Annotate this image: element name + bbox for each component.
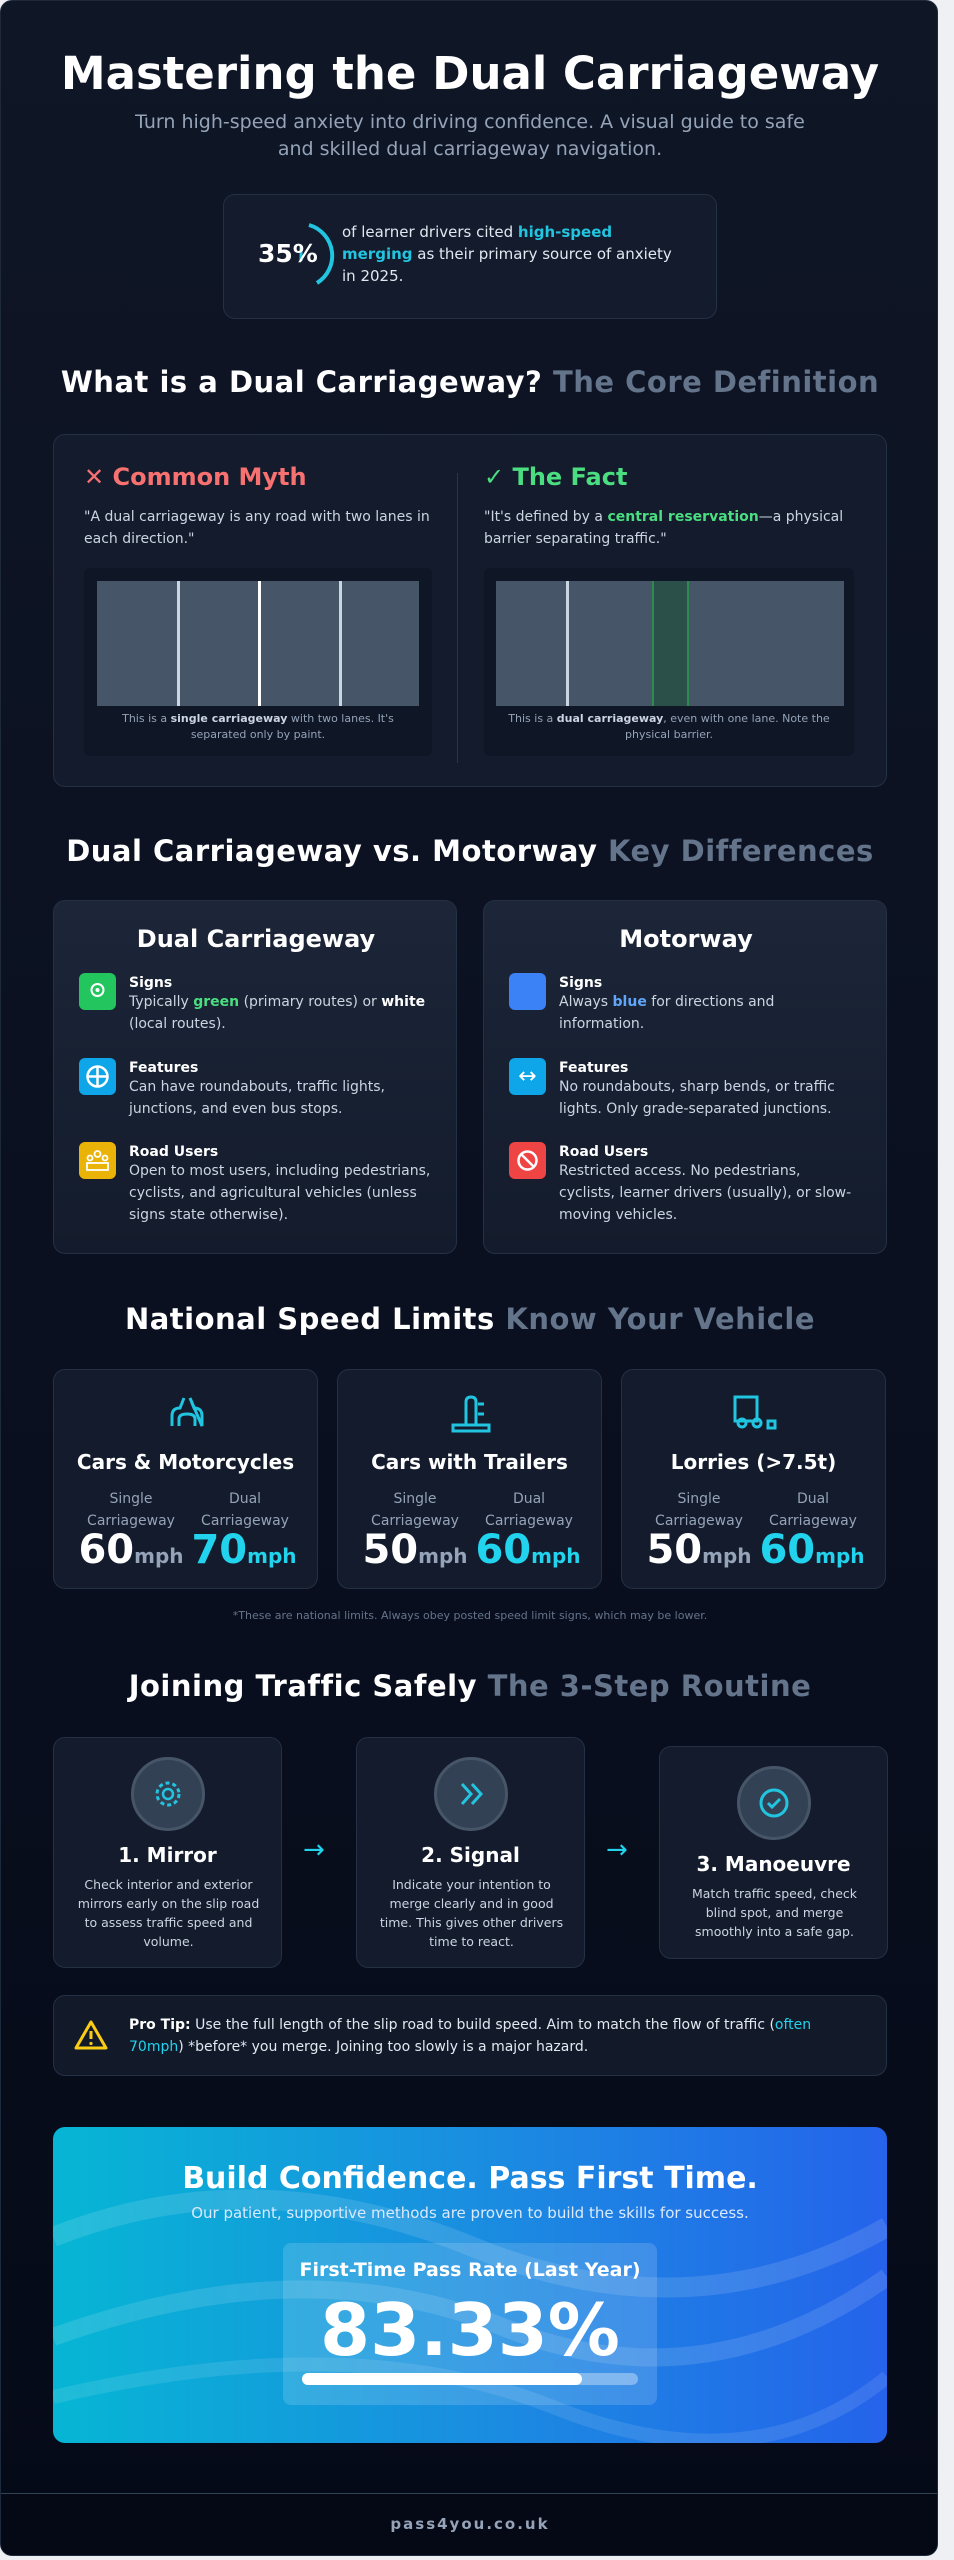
footnote: *These are national limits. Always obey posted speed limit signs, which may be lower. xyxy=(233,1609,707,1622)
item: road users: Road Users xyxy=(129,1144,218,1160)
item: features: Features xyxy=(129,1060,198,1076)
panel: dual carriageway: Dual Carriageway xyxy=(137,925,375,953)
item: signs xyxy=(559,975,774,1032)
item: features: No roundabouts, sharp bends, or traffic lights. Only grade-separated junctions. xyxy=(559,1079,835,1117)
item: signs: Signs xyxy=(559,975,602,991)
speed card: cars xyxy=(53,1369,318,1589)
fact column xyxy=(484,463,844,741)
icon: gauge arc xyxy=(300,223,334,285)
step 1: 1. Mirror xyxy=(118,1843,217,1867)
speed card: lorries: 60mph xyxy=(759,1527,865,1573)
myth heading: ✕ Common Myth xyxy=(84,463,307,491)
speed card: cars: Cars & Motorcycles xyxy=(77,1450,294,1474)
speed card: trailers xyxy=(337,1369,602,1589)
step 2: Indicate your intention to merge clearly and in good time. This gives other drivers time to react. xyxy=(380,1877,563,1949)
item: signs: Signs xyxy=(129,975,172,991)
fact road diagram xyxy=(484,568,854,756)
item: road users: Road Users xyxy=(559,1144,648,1160)
speed card: cars: 60mph xyxy=(78,1527,184,1573)
pro tip xyxy=(53,1995,887,2076)
item: signs: Always blue for directions and information. xyxy=(559,994,774,1032)
icon: features xyxy=(79,1058,116,1095)
heading: key differences: Dual Carriageway vs. Motorway Key Differences xyxy=(66,834,874,868)
icon: gear xyxy=(131,1757,205,1831)
myth quote: "A dual carriageway is any road with two lanes in each direction." xyxy=(84,509,430,547)
step 2: 2. Signal xyxy=(421,1843,520,1867)
CTA banner xyxy=(53,2127,887,2443)
icon: warning xyxy=(74,2020,108,2050)
speed card: lorries: Single Carriageway xyxy=(655,1491,743,1529)
title: Mastering the Dual Carriageway xyxy=(61,47,879,100)
panel: motorway xyxy=(483,900,887,1254)
icon: lorry xyxy=(734,1396,776,1430)
item: signs: Typically green (primary routes) or white (local routes). xyxy=(129,994,425,1032)
icon: arrows: ↔ xyxy=(518,1064,537,1089)
speed card: trailers: 50mph xyxy=(362,1527,468,1573)
panel: myth vs fact xyxy=(53,434,887,787)
icon: check circle xyxy=(737,1766,811,1840)
fact road diagram: This is a dual carriageway, even with one lane. Note the physical barrier. xyxy=(508,712,830,741)
panel: dual carriageway xyxy=(53,900,457,1254)
pass rate box: 83.33% xyxy=(320,2288,620,2372)
CTA heading: Build Confidence. Pass First Time. xyxy=(182,2161,758,2196)
speed card: lorries: 50mph xyxy=(646,1527,752,1573)
subtitle: Turn high-speed anxiety into driving confidence. A visual guide to safe and skilled dual carriageway navigation. xyxy=(135,111,805,160)
speed card: trailers: Dual Carriageway xyxy=(485,1491,573,1529)
heading: core definition: What is a Dual Carriageway? The Core Definition xyxy=(61,365,879,399)
speed card: trailers: 60mph xyxy=(475,1527,581,1573)
item: road users: Open to most users, including pedestrians, cyclists, and agricultural vehicles (unless signs state otherwise). xyxy=(129,1163,430,1223)
arrow: → xyxy=(303,1835,325,1865)
item: features: Features xyxy=(559,1060,628,1076)
step 1 xyxy=(53,1737,282,1968)
panel: motorway: Motorway xyxy=(619,925,753,953)
speed card: cars: Dual Carriageway xyxy=(201,1491,289,1529)
footer: pass4you.co.uk xyxy=(390,2515,550,2533)
heading: speed limits: National Speed Limits Know Your Vehicle xyxy=(125,1302,815,1336)
CTA subtext: Our patient, supportive methods are proven to build the skills for success. xyxy=(191,2204,749,2222)
stat number: 35% xyxy=(258,239,318,268)
pass rate box xyxy=(283,2243,657,2405)
item: road users: Restricted access. No pedestrians, cyclists, learner drivers (usually), or slow-moving vehicles. xyxy=(559,1163,851,1223)
icon: trailer xyxy=(452,1396,490,1432)
stat text: of learner drivers cited high-speed merging as their primary source of anxiety in 2025. xyxy=(342,223,672,285)
pro tip: Pro Tip: Use the full length of the slip road to build speed. Aim to match the flow of traffic (often 70mph) *before* you merge. Joining too slowly is a major hazard. xyxy=(129,2017,811,2055)
heading: joining traffic: Joining Traffic Safely The 3-Step Routine xyxy=(129,1669,811,1703)
myth road diagram xyxy=(84,568,432,756)
step 3 xyxy=(659,1746,888,1959)
pass rate box: First-Time Pass Rate (Last Year) xyxy=(299,2259,641,2281)
speed card: trailers: Single Carriageway xyxy=(371,1491,459,1529)
step 3: Match traffic speed, check blind spot, and merge smoothly into a safe gap. xyxy=(692,1886,857,1939)
myth column xyxy=(84,463,430,741)
item: features xyxy=(128,1060,385,1117)
stat callout xyxy=(223,194,717,319)
speed card: lorries: Lorries (>7.5t) xyxy=(671,1450,836,1474)
icon: no entry xyxy=(509,1142,546,1179)
item: features: Can have roundabouts, traffic lights, junctions, and even bus stops. xyxy=(129,1079,385,1117)
arrow: → xyxy=(606,1835,628,1865)
myth road diagram: This is a single carriageway with two lanes. It's separated only by paint. xyxy=(122,712,394,741)
icon: blue sign xyxy=(509,973,546,1010)
step 3: 3. Manoeuvre xyxy=(696,1852,851,1876)
speed card: lorries: Dual Carriageway xyxy=(769,1491,857,1529)
progress bar xyxy=(302,2373,638,2385)
speed card: cars: Single Carriageway xyxy=(87,1491,175,1529)
item: signs xyxy=(128,975,425,1032)
item: features xyxy=(559,1060,835,1117)
fact heading: ✓ The Fact xyxy=(484,463,627,491)
fact quote: "It's defined by a central reservation—a physical barrier separating traffic." xyxy=(484,509,843,547)
icon: signs xyxy=(79,973,116,1010)
speed card: cars: 70mph xyxy=(191,1527,297,1573)
step 2 xyxy=(356,1737,585,1968)
speed card: lorries xyxy=(621,1369,886,1589)
icon: road users xyxy=(79,1142,116,1179)
icon: car xyxy=(170,1397,204,1427)
icon: arrows xyxy=(509,1058,546,1095)
icon: chevrons xyxy=(434,1757,508,1831)
step 1: Check interior and exterior mirrors early on the slip road to assess traffic speed and volume. xyxy=(78,1877,259,1949)
speed card: trailers: Cars with Trailers xyxy=(371,1450,568,1474)
